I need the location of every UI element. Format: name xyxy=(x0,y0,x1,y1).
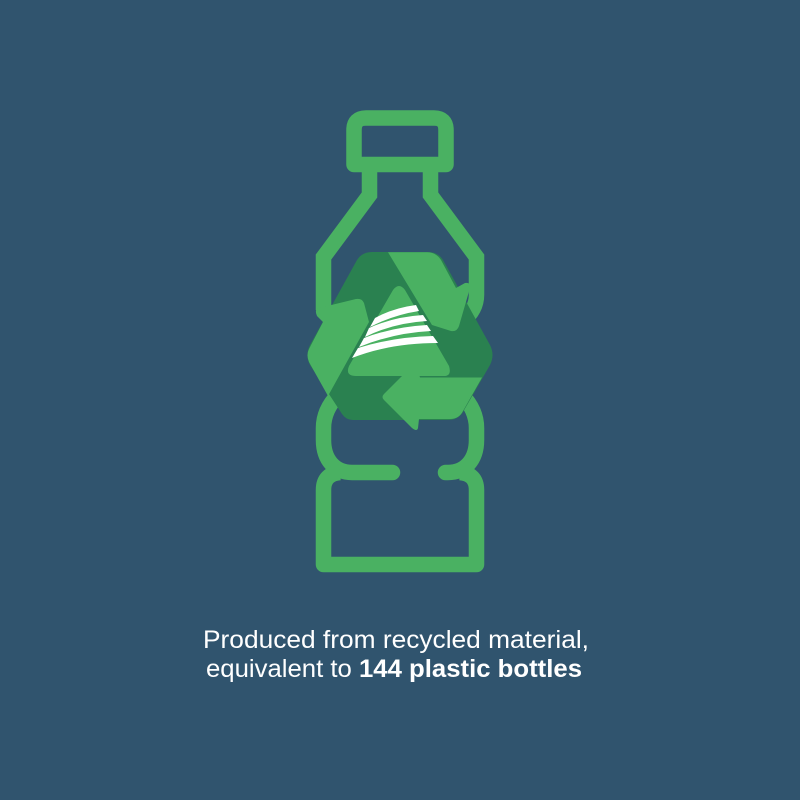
arrow: bottom xyxy=(382,365,482,430)
hexagon backing xyxy=(308,252,492,420)
caption xyxy=(203,626,589,683)
caption line 1: Produced from recycled material, xyxy=(203,626,589,654)
icon: plastic bottle outline xyxy=(324,118,476,564)
icon: recycling symbol xyxy=(308,252,492,430)
arrow: top right xyxy=(388,252,470,331)
caption line 2: equivalent to 144 plastic bottles xyxy=(206,655,582,683)
arrow: left xyxy=(308,299,369,396)
white stripes xyxy=(352,305,438,358)
center triangle with white stripes xyxy=(348,286,450,376)
